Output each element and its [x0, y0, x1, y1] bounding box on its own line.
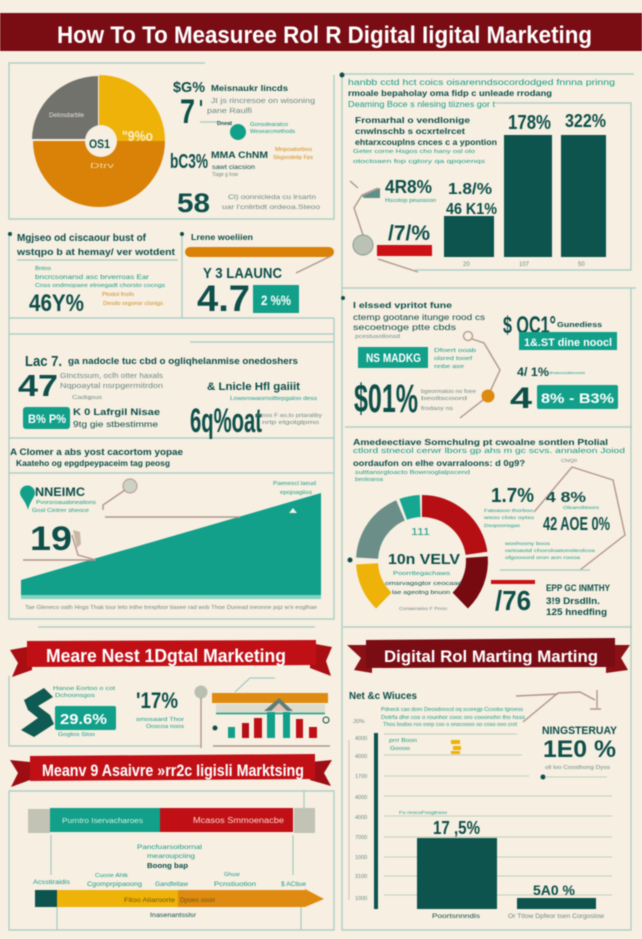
panel: gauge analysis: /76 — [495, 585, 531, 616]
stat: 7 percent: 7 — [180, 93, 195, 131]
pie chart: Delosdarble — [49, 113, 85, 119]
icon: yellow marker — [451, 740, 461, 754]
panel: digital stats: Nqpoaytal nsrpgermitrdon — [60, 383, 163, 390]
arrow timeline — [35, 889, 324, 907]
panel: channel comparison bars: Hscotop peuosoon — [385, 198, 436, 204]
bars — [417, 818, 605, 920]
ribbon: measure: Meanv 9 Asaivre »rr2c Iigisli Marktsing — [42, 761, 304, 780]
panel: timeline: mearoupciing — [147, 854, 195, 860]
bars: Or Ttlow Dpfeor tsen Corgoslow — [508, 914, 605, 920]
panel: gauge analysis: Fatoasoo thorboo — [484, 508, 534, 513]
segmented bar: Mcasos Smmoenacbe — [193, 816, 285, 825]
ribbon: measure digital marketing — [10, 640, 332, 677]
panel: gauge analysis: 1.7% — [491, 485, 534, 507]
bars: 17 ,5% — [433, 818, 480, 838]
panel: gauge analysis: oordaufon on elhe ovarraloons: d 0g9? — [353, 458, 525, 468]
panel: timeline: Inasenantsslsr — [150, 913, 196, 919]
panel: digital stats: B% P% — [28, 412, 66, 426]
panel: area chart: 19 — [30, 520, 72, 558]
bars: Poortsnnndis — [432, 913, 481, 920]
connector — [516, 690, 601, 722]
gauge chart: 10n VELV — [388, 551, 460, 568]
stat: 60 percent — [170, 147, 314, 178]
bar chart — [444, 111, 606, 268]
panel: digital stats: 9tg gie stbestimme — [73, 420, 159, 429]
icon: pin connector — [23, 479, 240, 560]
bars: 5A0 % — [533, 882, 576, 898]
bar chart: 107 — [519, 262, 530, 268]
panel: channel comparison bars: hanbb cctd hct coics oisarenndsocordodged fnnna prinng — [348, 77, 615, 87]
panel: spend metrics: Dfoert ooab — [434, 348, 476, 354]
pie chart: "9%o — [122, 128, 153, 145]
heading: growth: Kaateho og epgdpeypaceim tag peosg — [16, 459, 170, 468]
panel: digital stats: 47 — [18, 368, 58, 403]
stat: 7 percent: Meisnaukr lincds — [211, 84, 289, 93]
panel: spend metrics: 8% - B3% — [541, 390, 615, 406]
panel: timeline: Pancfuarsoibornal — [137, 845, 202, 851]
panel: customer cost: Desdo orgonsr clsnigs — [103, 301, 164, 307]
panel: area chart: NNEIMC — [35, 485, 85, 499]
stat: 7 percent: $G% — [173, 79, 205, 96]
stat: 60 percent: sawt ciacsion — [212, 165, 255, 171]
stat: 7 percent: Wesearcmethods — [250, 129, 296, 135]
segmented bar — [28, 808, 315, 833]
panel: channel comparison bars — [340, 72, 636, 640]
panel: 4.7 metric: 2 %% — [261, 292, 291, 308]
panel: bottom bar chart: NINGSTERUAY — [542, 725, 618, 737]
panel: gauge analysis: sutttansrgtoacto Bowrooglalpscend — [355, 470, 470, 476]
stat: 58: uar l'cnlirbdt ordeoa.Steoo — [222, 205, 321, 211]
stat: 60 percent: Tiage g lrow — [212, 172, 238, 178]
panel: bottom bar chart: prrr Boon — [389, 738, 417, 744]
icon: teal bulb — [20, 486, 35, 510]
arrow timeline: Dpoeo ooon — [180, 898, 215, 904]
panel: spend metrics: ctemp gootane itunge rood cs — [353, 313, 485, 322]
panel: dollar stats: 29.6% — [60, 711, 107, 728]
area chart — [21, 493, 321, 599]
panel: area chart — [9, 438, 334, 619]
panel: bottom bar chart: Net &c Wiuces — [349, 691, 417, 702]
panel: dollar stats: Ooscoa noos — [146, 724, 185, 730]
y axis: 1700 — [355, 774, 367, 780]
panel: gauge analysis: ctlord stnecol cerwr lbors gp ahs m gc scvs. annaleon Joiod — [353, 448, 625, 455]
panel: pie chart and key stats — [9, 63, 334, 219]
connector with nodes — [460, 332, 500, 418]
segmented bar: Purntro Iservacharoes — [62, 818, 144, 825]
gauge chart: lae ageotng bnuon — [392, 590, 450, 596]
panel: gauge analysis: beoloaroa — [355, 477, 383, 483]
gauge chart: Conaenaiso F Pooo — [399, 606, 448, 611]
rule — [343, 626, 632, 628]
panel: spend metrics: secoetnoge ptte cbds — [353, 323, 456, 332]
pie chart: OS1 — [89, 137, 110, 151]
stat: 60 percent: bC3% — [170, 151, 208, 173]
panel: spend metrics: 4/ 1% — [517, 365, 549, 379]
ribbon: measure digital marketing: Meare Nest 1Dgtal Marketing — [46, 646, 286, 666]
panel: channel comparison bars: Deaming Boce s nlesing tiiznes gor t — [348, 100, 496, 109]
icon: dollar — [21, 688, 54, 737]
panel: gauge analysis: EPP GC INMTHY — [546, 583, 610, 593]
panel: digital stats: ga nadocle tuc cbd o ogliqhelanmise onedoshers — [68, 356, 298, 366]
panel: gauge analysis: woshoony boos — [505, 541, 551, 546]
panel: spend metrics: nnbe ase — [434, 364, 464, 370]
arrow timeline: Fitoo Atiaroorte — [124, 898, 176, 904]
stat: 60 percent: MMA ChNM — [211, 150, 268, 160]
panel: channel comparison bars: otoctoaen fop cgtory qa qpqoenqs — [353, 159, 485, 165]
panel: digital stats: & Lnicle Hfl gaiiit — [207, 381, 300, 393]
y axis: 4000 — [355, 754, 367, 760]
panel: spend metrics: beoltscoord — [421, 396, 467, 402]
ribbon: digital roi — [347, 638, 630, 673]
ribbon: measure — [10, 754, 332, 787]
panel: bottom bar chart: Pdneck cao dorn Deosdnrocd oq scoregp Ccoobo tgroess — [381, 707, 524, 713]
panel: bottom bar chart — [342, 640, 631, 930]
panel: timeline: Cuooe Ahtk — [95, 873, 129, 879]
panel: digital stats: Lowsrowaornolttepgaloo dess — [230, 396, 318, 402]
panel: gauge analysis: Oleanobtoors — [563, 505, 600, 510]
panel: 4.7 metric — [180, 232, 334, 319]
panel: gauge analysis: 125 hnedfing — [546, 607, 607, 617]
y axis: 3100 — [355, 874, 367, 880]
y axis: 4000 — [355, 736, 367, 742]
panel: gauge analysis: 3!9 Drsdlln. — [546, 596, 600, 606]
title banner: How To To Measuree Rol R Digital Iigital Marketing — [57, 22, 592, 49]
gauge chart: Poorrttegachaws — [393, 571, 450, 577]
stat: 7 percent: Dneat — [217, 121, 232, 127]
pie chart — [32, 75, 165, 207]
y axis: 7000 — [355, 835, 367, 841]
stat: 58: Cl) oonnicleda cu lrsartn — [228, 195, 316, 201]
heading: growth — [9, 447, 334, 473]
panel: digital stats — [9, 318, 334, 440]
panel: spend metrics: 4 — [510, 382, 532, 415]
panel: timeline — [9, 790, 334, 930]
panel: timeline: Pcnstiuotion — [214, 882, 256, 888]
panel: spend metrics: $ QC1° — [503, 312, 556, 339]
panel: gauge analysis: ofgoooord oron aon roooa — [505, 555, 581, 560]
panel: spend metrics — [341, 296, 618, 421]
panel: timeline: Boong bap — [147, 863, 188, 870]
panel: bottom bar chart: oll loo Coosthong Dyos — [545, 765, 611, 771]
stat: 7 percent: Gonsdearatco — [250, 122, 288, 128]
panel: bottom bar chart: Fo nrocoFnogtrsoo — [399, 810, 448, 815]
stat: 7 percent: pane Raulfi — [207, 108, 253, 115]
panel: timeline: Gandfellaw — [155, 882, 189, 888]
bar chart: 178% — [508, 112, 551, 134]
y axis: 1000 — [355, 896, 367, 902]
bar chart: 46 K1% — [446, 201, 497, 218]
panel: spend metrics: $01% — [354, 377, 418, 421]
stat: 7 percent: JI js rincresoe on wisoning — [211, 98, 315, 105]
ribbon: digital roi: Digital Rol Marting Marting — [384, 647, 598, 666]
gauge chart: omsrvagsgtor ceocaad — [385, 581, 462, 587]
panel: customer cost: bncrcsonarsd asc brverroas Ear — [35, 275, 149, 281]
stat: 58: 58 — [177, 188, 210, 218]
title banner — [0, 13, 642, 51]
panel: spend metrics: dnaoooateooss — [549, 370, 585, 375]
panel: channel comparison bars: rmoale bepaholay oma fidp c unleade rrodang — [348, 88, 552, 98]
stat: 7 percent — [173, 79, 315, 140]
y axis — [352, 719, 378, 909]
panel: dollar stats — [9, 676, 200, 746]
stat: 58 — [177, 188, 321, 218]
y axis: .30% — [352, 719, 365, 725]
panel: spend metrics: bgeormatoo no foee — [421, 389, 476, 395]
panel: channel comparison bars: Fromarhal o vendlonige — [355, 115, 470, 125]
y axis: 4000 — [355, 795, 367, 801]
heading: growth: A Clomer a abs yost cacortom yopae — [10, 447, 183, 457]
panel: digital stats: 6q%oat — [190, 402, 262, 440]
y axis: 1000 — [355, 855, 367, 861]
panel: dollar stats: '17% — [136, 688, 178, 713]
gauge chart: 111 — [411, 527, 431, 538]
panel: bottom bar chart: Dotrfa dhe cos o rounhor cooc oro cooonohn tho hsss — [381, 715, 526, 721]
panel: gauge analysis: Amedeectiave Somchulng pt cwoalne sontlen Ptolial — [353, 437, 608, 447]
panel: customer cost: 46Y% — [29, 290, 84, 317]
panel: digital stats: Gtnctssum, oclh otter haxals — [60, 373, 164, 380]
panel: dollar stats: Gogtos Stoo — [58, 732, 95, 738]
panel: dollar stats: smosaard Thor — [136, 717, 184, 723]
panel: 4.7 metric: Lrene woeliien — [191, 233, 253, 242]
panel: 4.7 metric: Y 3 LAAUNC — [203, 265, 282, 282]
panel: channel comparison bars: cnwlnschb s ocxrtelrcet — [355, 126, 465, 136]
bar chart: 322% — [565, 111, 606, 131]
panel: gauge analysis: 4 8% — [546, 489, 586, 506]
panel: timeline: Acsstiraidis — [33, 880, 70, 886]
decorative rule — [38, 626, 315, 628]
panel: dollar stats: Dchoonsgos — [55, 693, 96, 699]
panel: channel comparison bars: Geter corne Hsgos cho hany osl olo — [353, 149, 475, 155]
connector outline — [534, 467, 625, 570]
panel: bottom bar chart: Thos bodoo roo oorp coo o onscoooo oo coso ooo crot — [383, 722, 518, 728]
panel: gauge analysis: Dsopoonsgas — [484, 523, 521, 528]
stat: 60 percent: Mnpoatorbos — [275, 147, 313, 153]
panel: spend metrics: 1&.ST dine noocl — [524, 337, 612, 349]
panel: 4.7 metric: 4.7 — [197, 278, 250, 319]
y axis: 4000 — [355, 815, 367, 821]
panel: customer cost — [8, 232, 334, 318]
panel: gauge analysis: ChiQ0 — [561, 458, 578, 463]
panel: area chart: Tae Gleneco oath Hngs Thak tour leto inthe trexpfoor tiaxee rad wob Thoe Dunead ineonne pqz w'e eoglhae — [25, 605, 317, 611]
panel: customer cost: Cnss ondmopaee elroegadt chorsto cocngs — [35, 283, 166, 289]
panel: spend metrics: I elssed vpritot fune — [353, 300, 452, 310]
panel: area chart: Paenescl laeud — [273, 481, 316, 487]
pie chart: Dtrv — [90, 163, 115, 170]
icon: gauge stand — [350, 181, 418, 272]
panel: spend metrics: pcestusotlonsd — [355, 334, 400, 340]
panel: spend metrics: Gunediess — [557, 322, 602, 329]
gauge chart — [348, 495, 488, 611]
panel: digital stats: Ptnos F ao,to prtaraliby — [256, 413, 323, 419]
panel: customer cost: Bntos — [35, 266, 52, 272]
panel: spend metrics: frodaoy ns — [421, 406, 454, 412]
panel: dollar stats: Hanoe Eortoo o cot — [53, 686, 116, 692]
panel: bottom bar chart: Goooo — [390, 746, 410, 752]
panel: customer cost: wstqpo b at hemay/ ver wotdent — [16, 247, 175, 257]
panel: bottom bar chart: 1E0 % — [543, 736, 616, 763]
panel: timeline: Ghuar — [224, 872, 240, 878]
rule — [345, 426, 632, 428]
chart: building bars — [212, 678, 330, 746]
panel: area chart: Pvorsroauabneations — [36, 500, 97, 506]
gridlines — [384, 734, 612, 895]
panel: timeline: $ ACtiue — [281, 882, 307, 888]
panel: spend metrics: NS MADKG — [366, 351, 421, 365]
panel: channel comparison bars: 4R8% — [385, 177, 432, 197]
panel: digital stats: Lac 7. — [25, 353, 62, 370]
panel: digital stats: K 0 Lafrgil Nisae — [73, 407, 160, 417]
panel: digital stats: nrtp elgotglpmo — [262, 420, 319, 426]
stat: 60 percent: Slsgsodetip Fps — [273, 155, 314, 161]
bar chart: 1.8/% — [448, 181, 492, 198]
icon: pin post — [194, 686, 208, 748]
bar chart: 20 — [463, 262, 470, 268]
panel: channel comparison bars: ehtarxcouplns cnces c a ypontion — [355, 138, 497, 147]
panel: gauge analysis — [348, 437, 625, 617]
panel: digital stats: Cadqpus — [72, 395, 103, 401]
panel: channel comparison bars: /7/% — [388, 222, 430, 245]
panel: timeline: Cgomprpipaoong — [87, 882, 142, 888]
panel: customer cost: Ptodol fnsfo — [102, 292, 134, 298]
panel: gauge analysis: 42 AOE 0% — [543, 514, 610, 534]
panel: gauge analysis: wsoo cloto oytso — [484, 515, 535, 520]
panel: spend metrics: olsred tooef — [434, 356, 473, 362]
panel: gauge analysis: oetoaotd choroloatonsleolcos — [505, 548, 596, 553]
panel: area chart: Gosl Cintrer sheoce — [32, 508, 89, 514]
panel: area chart: epojoagiios — [280, 490, 313, 496]
panel: customer cost: Mgjseo od ciscaour bust of — [17, 233, 147, 244]
bar chart: 50 — [578, 262, 585, 268]
